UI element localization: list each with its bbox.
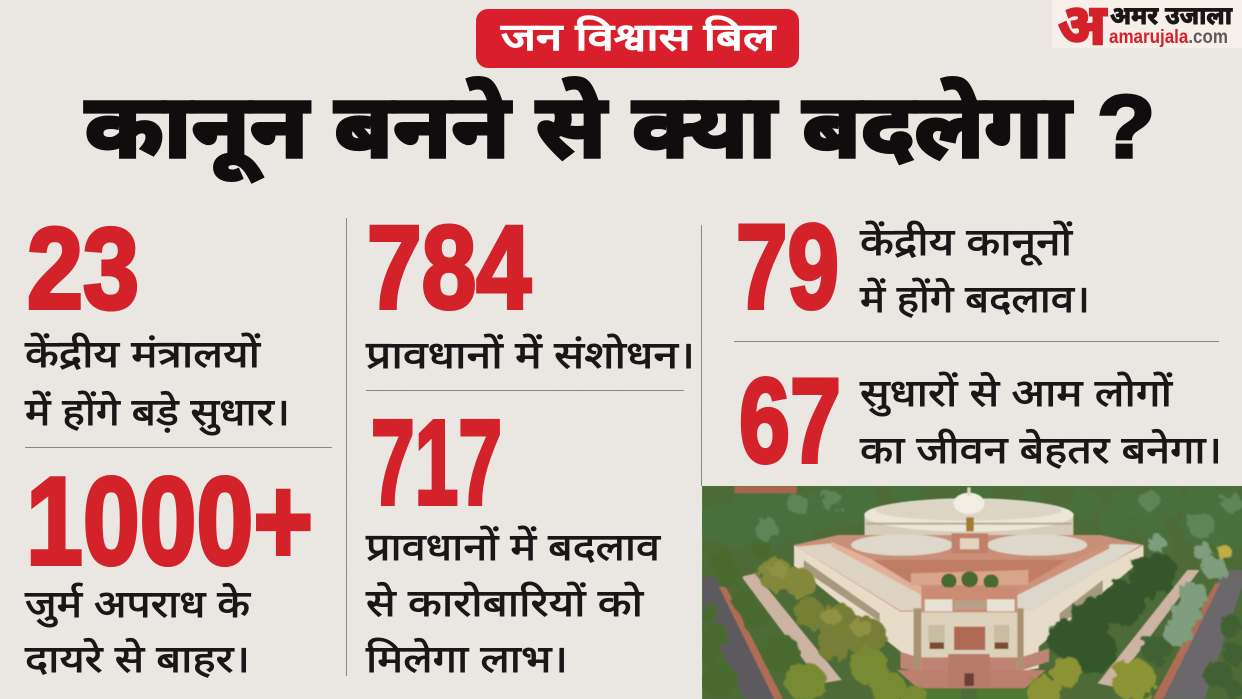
title: कानून बनने से क्या बदलेगा ? (85, 77, 1155, 182)
background trees (702, 488, 1242, 543)
logo: amar ujala (1052, 0, 1242, 56)
logo: amar ujala: अमर उजाला (1110, 2, 1233, 30)
text: offences (25, 582, 251, 681)
logo: amar ujala: amarujala.com (1109, 27, 1228, 48)
roof (794, 535, 1144, 612)
text: central laws: में होंगे बदलाव। (860, 277, 1090, 321)
text: ministries: में होंगे बड़े सुधार। (25, 390, 290, 435)
text: business benefit: मिलेगा लाभ। (366, 637, 568, 681)
rotunda (864, 487, 1074, 535)
text: central laws (860, 220, 1090, 321)
foreground trees (700, 535, 1242, 699)
stat: 79 central laws (736, 200, 1090, 334)
number 1000+: 1000+ (26, 453, 313, 591)
text: business benefit (366, 525, 661, 681)
number 79: 79 (736, 200, 839, 334)
text: offences: दायरे से बाहर। (25, 637, 250, 681)
text: reforms: सुधारों से आम लोगों (860, 371, 1173, 416)
courtyard trees (941, 571, 999, 589)
text: reforms (860, 371, 1222, 472)
text: reforms: का जीवन बेहतर बनेगा। (860, 428, 1222, 472)
number 784: 784 (367, 202, 531, 334)
stat: 23 ministries (25, 205, 290, 435)
roads (703, 577, 778, 699)
stepped walkways (741, 573, 842, 683)
stat: 1000+ offences (25, 453, 313, 681)
text: amendments: प्रावधानों में संशोधन। (366, 333, 695, 377)
stat: 784 provisions (366, 202, 695, 377)
badge: jan vishwas bill (476, 9, 799, 68)
text: offences: जुर्म अपराध के (25, 582, 251, 627)
stat: 67 reforms (739, 354, 1222, 488)
stat: 717 provisions (366, 394, 661, 681)
central tower (952, 533, 988, 553)
text: business benefit: से कारोबारियों को (366, 581, 644, 625)
number 67: 67 (739, 354, 841, 488)
building walls (794, 545, 1144, 672)
number 23: 23 (27, 205, 139, 333)
text: ministries: केंद्रीय मंत्रालयों (25, 332, 261, 376)
badge: jan vishwas bill: जन विश्वास बिल (501, 15, 777, 59)
text: business benefit: प्रावधानों में बदलाव (366, 525, 661, 569)
text: central laws: केंद्रीय कानूनों (860, 220, 1073, 266)
front block (921, 612, 1017, 658)
number 717: 717 (371, 394, 502, 530)
illustration: parliament building (700, 482, 1242, 699)
text: ministries (25, 332, 290, 435)
